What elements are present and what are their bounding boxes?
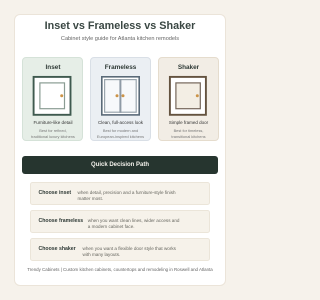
choose frameless text — [88, 218, 180, 229]
shaker description: Best for timeless, — [174, 128, 203, 133]
title: Inset vs Frameless vs Shaker — [45, 20, 195, 32]
frameless description: Best for modern and — [103, 128, 138, 133]
frameless heading: Frameless — [105, 64, 136, 71]
choose inset text: when detail, precision and a furniture-style finish — [78, 190, 176, 195]
row: choose inset — [30, 182, 210, 205]
choose shaker text: when you want a flexible door style that works — [82, 246, 176, 251]
row: choose shaker — [30, 238, 210, 261]
shaker label: Simple framed door — [169, 120, 208, 125]
inset description: traditional luxury kitchens — [31, 134, 75, 139]
inset description: Best for refined, — [39, 128, 67, 133]
shaker heading: Shaker — [178, 64, 199, 71]
icon: shaker door — [168, 76, 207, 116]
row: choose frameless — [30, 210, 210, 233]
frameless description — [97, 128, 144, 139]
choose shaker text — [82, 246, 176, 257]
choose shaker text: with many layouts. — [82, 252, 120, 257]
choose frameless text: when you want clean lines, wider access and — [88, 218, 179, 223]
shaker description: transitional kitchens — [171, 134, 206, 139]
icon: inset door — [32, 76, 72, 116]
choose frameless label: Choose frameless — [38, 218, 83, 224]
choose inset text: matter most. — [78, 196, 103, 201]
main card — [14, 14, 226, 286]
choose frameless text: a modern cabinet face. — [88, 224, 135, 229]
panel: inset — [22, 57, 82, 141]
footer: Trendy Cabinets | Custom kitchen cabinets, countertops and remodeling in Roswell and Atlanta — [27, 267, 213, 272]
frameless description: European-inspired kitchens — [97, 134, 144, 139]
choose inset label: Choose inset — [38, 190, 71, 196]
inset label: Furniture-like detail — [33, 120, 73, 125]
frameless label: Clean, full-access look — [98, 120, 143, 125]
quick decision path banner — [22, 156, 218, 174]
icon: frameless doors — [101, 76, 140, 116]
panel: frameless — [90, 57, 150, 141]
choose shaker label: Choose shaker — [38, 246, 76, 252]
inset heading: Inset — [46, 64, 60, 71]
inset description — [31, 128, 75, 139]
shaker description — [171, 128, 206, 139]
subtitle: Cabinet style guide for Atlanta kitchen remodels — [61, 36, 179, 42]
banner label: Quick Decision Path — [91, 162, 149, 168]
panel: shaker — [158, 57, 218, 141]
choose inset text — [78, 190, 176, 201]
